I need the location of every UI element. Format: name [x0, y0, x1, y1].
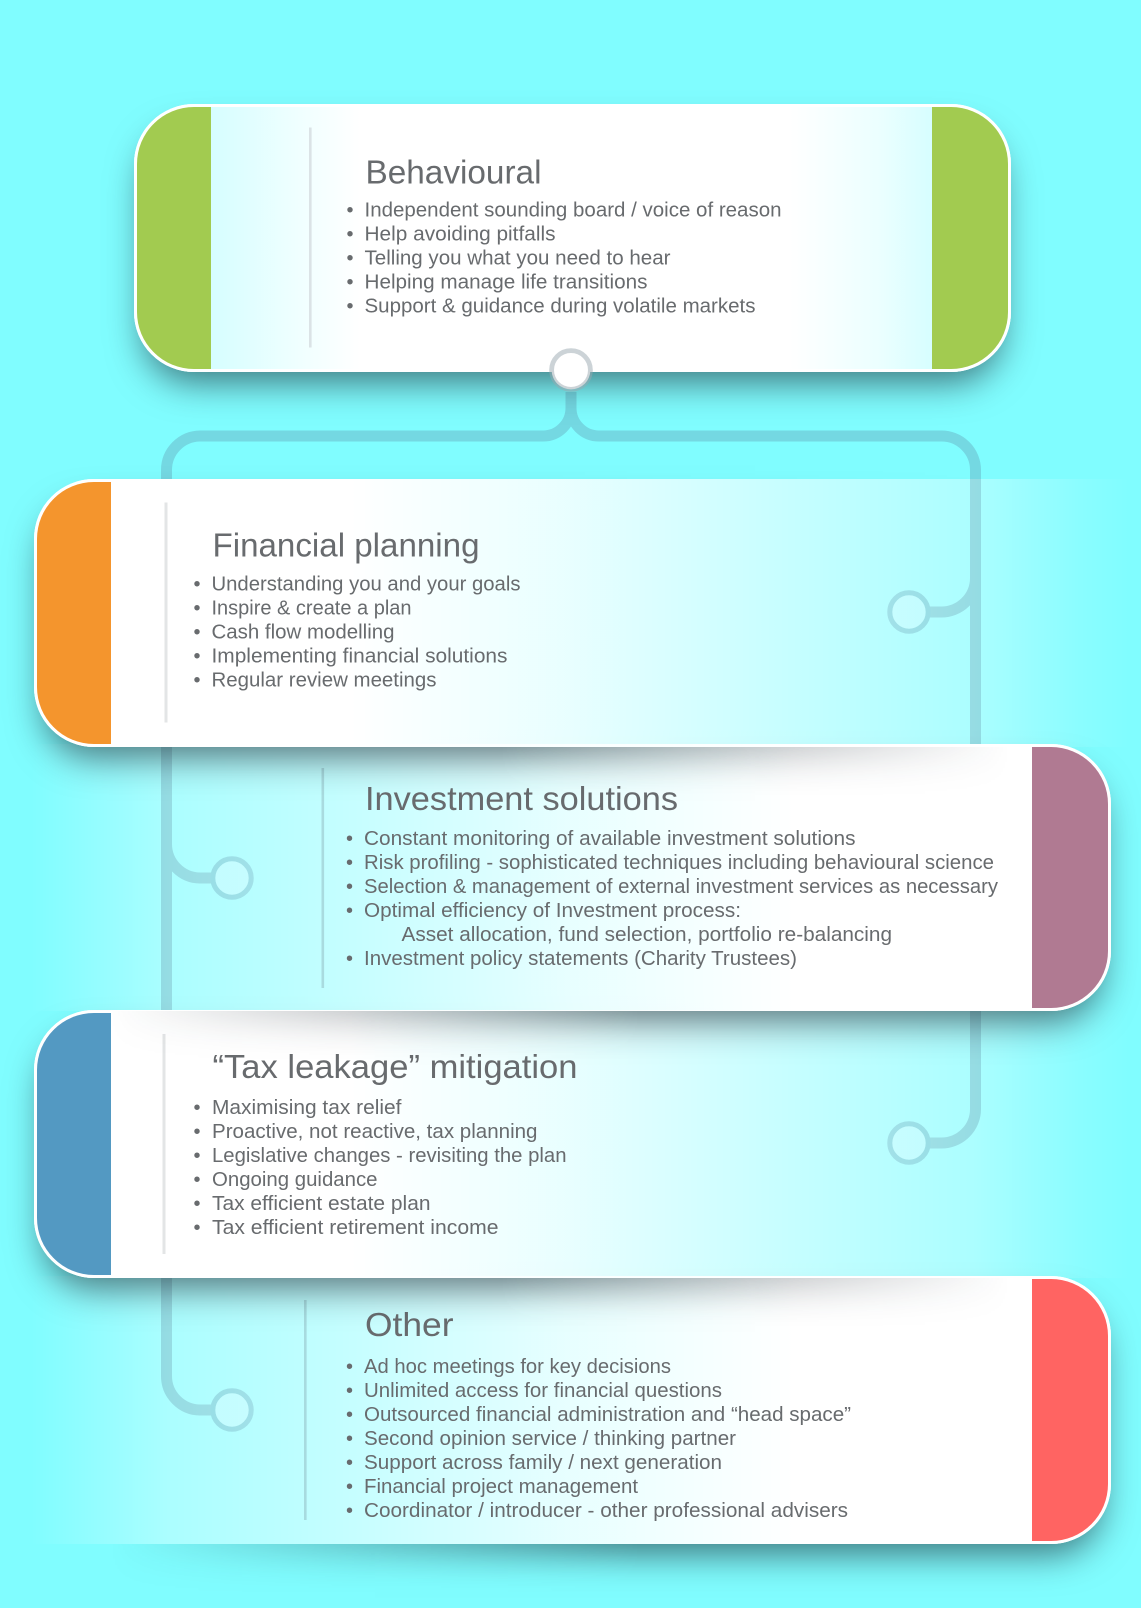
divider [308, 127, 311, 347]
bullet list: • [193, 1121, 200, 1143]
bullet list: • [346, 1476, 353, 1498]
node: other [213, 1391, 251, 1429]
connector: right trunk [930, 479, 976, 1143]
panel: Behavioural [117, 104, 1028, 409]
bullet list: Ongoing guidance [212, 1169, 377, 1191]
bullet list [346, 828, 998, 970]
bullet list: • [346, 247, 353, 269]
bullet list: Unlimited access for financial questions [364, 1380, 722, 1402]
bullet list: • [346, 271, 353, 293]
heading: Other [365, 1306, 454, 1343]
bullet list: • [193, 1169, 200, 1191]
bullet list: Inspire & create a plan [211, 597, 411, 619]
bullet list: Coordinator / introducer - other professional advisers [364, 1500, 848, 1522]
bullet list: Investment policy statements (Charity Trustees) [364, 948, 797, 970]
node: financial planning [890, 593, 928, 631]
bullet list: Tax efficient estate plan [212, 1193, 430, 1215]
bullet list [193, 1097, 566, 1239]
bullet list: Telling you what you need to hear [364, 247, 670, 269]
bullet list: Helping manage life transitions [364, 271, 647, 293]
bullet list: • [193, 621, 200, 643]
bullet list: • [346, 223, 353, 245]
bullet list: • [346, 1500, 353, 1522]
bullet list: • [346, 900, 353, 922]
bullet list: Constant monitoring of available investment solutions [364, 828, 856, 850]
bullet list: Understanding you and your goals [211, 573, 520, 595]
divider [304, 1300, 307, 1520]
bullet list: Tax efficient retirement income [212, 1217, 498, 1239]
bullet list: Ad hoc meetings for key decisions [364, 1356, 671, 1378]
bullet list: • [193, 1217, 200, 1239]
bullet list: Support & guidance during volatile markets [364, 295, 755, 317]
heading: Financial planning [212, 526, 479, 563]
bullet list: • [346, 1380, 353, 1402]
colour tab: right green [932, 104, 1010, 372]
bullet list: • [346, 852, 353, 874]
panel: Investment solutions [59, 744, 1128, 1048]
bullet list: • [346, 828, 353, 850]
heading: “Tax leakage” mitigation [212, 1048, 577, 1085]
bullet list: • [346, 1404, 353, 1426]
bullet list: Optimal efficiency of Investment process: [364, 900, 741, 922]
bullet list: Outsourced financial administration and “head space” [364, 1404, 851, 1426]
bullet list: • [193, 1097, 200, 1119]
node: tax leakage [890, 1124, 928, 1162]
bullet list: Maximising tax relief [212, 1097, 401, 1119]
colour tab: red [1032, 1276, 1110, 1544]
connector: left trunk [166, 479, 212, 1410]
connector: upper trunk above the cards [166, 392, 976, 480]
colour tab: blue [34, 1010, 111, 1278]
bullet list: Help avoiding pitfalls [364, 223, 555, 245]
bullet list: • [193, 1193, 200, 1215]
node: investment solutions [213, 859, 251, 897]
bullet list: • [193, 645, 200, 667]
heading: Behavioural [365, 153, 541, 190]
divider [164, 502, 167, 722]
bullet list: • [193, 1145, 200, 1167]
bullet list [346, 1356, 851, 1522]
bullet list: Second opinion service / thinking partner [364, 1428, 736, 1450]
bullet list: Cash flow modelling [211, 621, 394, 643]
panel: Tax leakage mitigation [17, 1010, 1088, 1315]
panel: Other [59, 1276, 1128, 1581]
bullet list: Independent sounding board / voice of reason [364, 199, 781, 221]
bullet list: • [346, 948, 353, 970]
bullet list [346, 199, 781, 317]
bullet list: Implementing financial solutions [211, 645, 507, 667]
bullet list: • [346, 1356, 353, 1378]
bullet list: • [346, 199, 353, 221]
bullet list: Financial project management [364, 1476, 638, 1498]
bullet list: Legislative changes - revisiting the plan [212, 1145, 566, 1167]
bullet list: • [193, 573, 200, 595]
bullet list: • [346, 295, 353, 317]
bullet list: Support across family / next generation [364, 1452, 722, 1474]
bullet list [193, 573, 520, 691]
bullet list: • [193, 669, 200, 691]
bullet list: Proactive, not reactive, tax planning [212, 1121, 537, 1143]
panel: Financial planning [17, 479, 1088, 784]
colour tab: purple [1032, 744, 1110, 1011]
bullet list: Risk profiling - sophisticated techniques including behavioural science [364, 852, 994, 874]
divider [162, 1034, 165, 1254]
colour tab: orange [34, 478, 111, 746]
colour tab: left green [134, 104, 211, 372]
bullet list: Asset allocation, fund selection, portfolio re-balancing [402, 924, 892, 946]
divider [322, 768, 324, 988]
bullet list: Regular review meetings [211, 669, 436, 691]
bullet list: Selection & management of external investment services as necessary [364, 876, 998, 898]
bullet list: • [193, 597, 200, 619]
bullet list: • [346, 1452, 353, 1474]
heading: Investment solutions [365, 780, 678, 817]
bullet list: • [346, 876, 353, 898]
bullet list: • [346, 1428, 353, 1450]
